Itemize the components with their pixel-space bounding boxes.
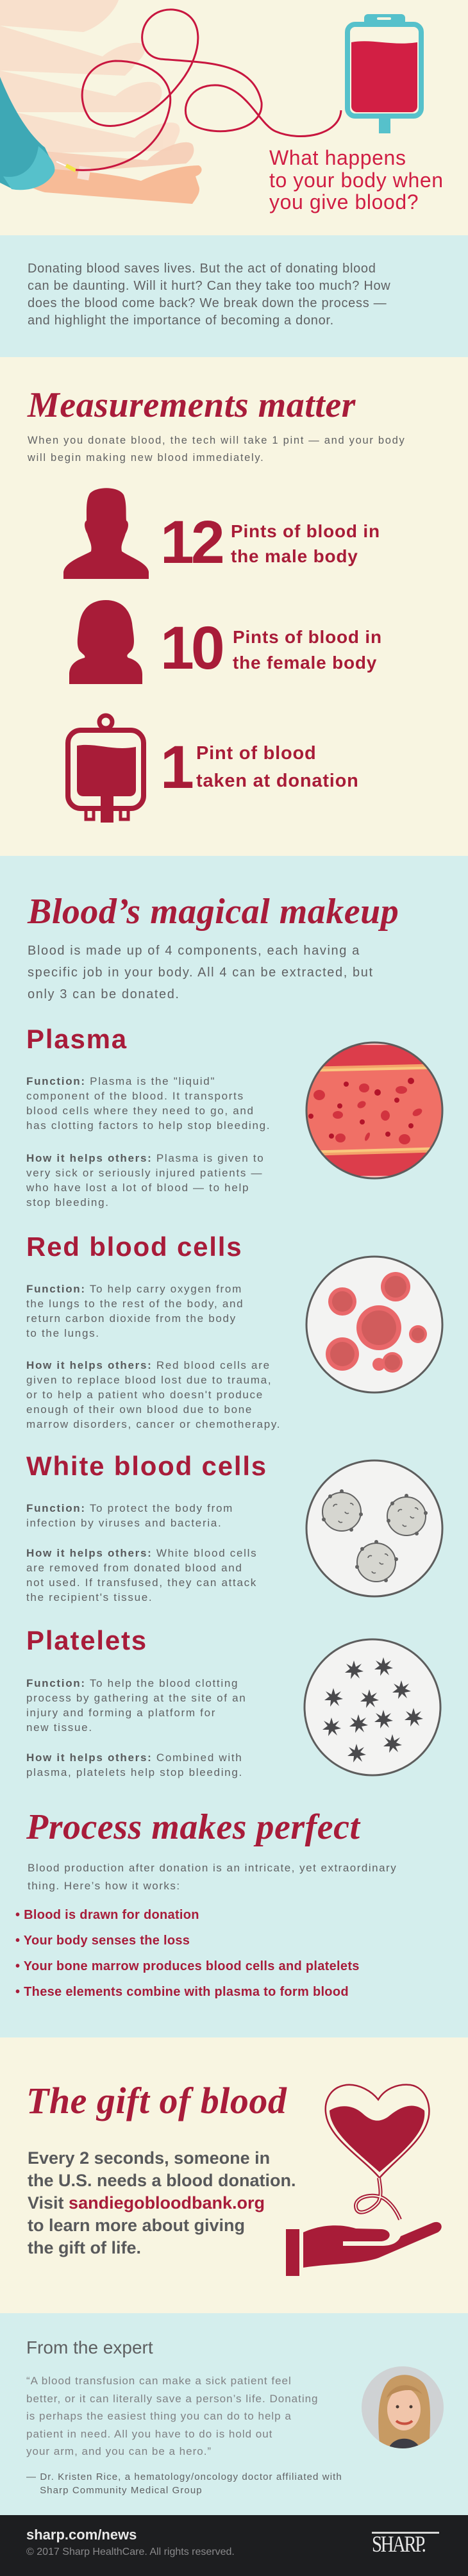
plasma text: blood cells where they need to go, and bbox=[26, 1105, 255, 1117]
icon: male silhouette bbox=[63, 488, 149, 579]
sleeve bbox=[0, 77, 54, 190]
footer: copyright: © 2017 Sharp HealthCare. All rights reserved. bbox=[26, 2547, 235, 2557]
rbc text: to the lungs. bbox=[26, 1327, 100, 1339]
gift text: Visit sandiegobloodbank.org bbox=[28, 2193, 265, 2212]
panel: red blood cells: marrow disorders, cancer or chemotherapy. bbox=[26, 1418, 281, 1430]
gift text: the U.S. needs a blood donation. bbox=[28, 2171, 296, 2190]
panel: red blood cells: given to replace blood lost due to trauma, bbox=[26, 1374, 272, 1386]
wbc text bbox=[26, 1502, 233, 1529]
list: process steps: • These elements combine with plasma to form blood bbox=[15, 1985, 349, 1999]
list: process steps: • Blood is drawn for donation bbox=[15, 1908, 199, 1922]
panel: plasma: very sick or seriously injured patients — bbox=[26, 1167, 263, 1179]
panel: plasma: who have lost a lot of blood — to help bbox=[26, 1182, 249, 1194]
makeup intro bbox=[28, 944, 374, 1001]
panel: red blood cells: or to help a patient who doesn't produce bbox=[26, 1389, 263, 1401]
panel: plasma bbox=[26, 1024, 271, 1209]
quote: is perhaps the easiest thing you can do to help a bbox=[26, 2410, 292, 2422]
ghost arms bbox=[0, 0, 180, 154]
gift text: the gift of life. bbox=[28, 2238, 141, 2257]
text: the male body bbox=[231, 546, 358, 566]
stat: 12 pints male: 12 bbox=[160, 508, 222, 576]
plasma text bbox=[26, 1075, 271, 1132]
panel: white blood cells: are removed from donated blood and bbox=[26, 1562, 243, 1574]
icon: female silhouette bbox=[69, 600, 142, 684]
makeup intro: only 3 can be donated. bbox=[28, 987, 180, 1001]
quote: “A blood transfusion can make a sick patient feel bbox=[26, 2375, 292, 2387]
text: taken at donation bbox=[196, 771, 359, 791]
band: teal expert bbox=[0, 2313, 468, 2515]
attribution: — Dr. Kristen Rice, a hematology/oncology doctor affiliated with bbox=[26, 2471, 342, 2482]
subtitle: measurements: will begin making new blood immediately. bbox=[28, 452, 264, 464]
tube bbox=[76, 10, 341, 170]
text: Pints of blood in bbox=[233, 627, 382, 647]
panel: red blood cells: enough of their own blood due to bone bbox=[26, 1403, 253, 1416]
icon: red blood cells circle bbox=[305, 1255, 444, 1394]
title: you give blood? bbox=[269, 190, 419, 213]
text: Pint of blood bbox=[196, 743, 317, 764]
blood bag bbox=[347, 14, 421, 133]
panel: platelets: How it helps others: Combined with bbox=[26, 1752, 242, 1764]
heading: blood's magical makeup: Blood’s magical makeup bbox=[28, 892, 399, 932]
logo: sharp: SHARP. bbox=[372, 2531, 424, 2557]
platelets text: Function: To help the blood clotting bbox=[26, 1677, 238, 1689]
photo: expert portrait bbox=[362, 2366, 444, 2448]
icon: plasma circle bbox=[305, 1041, 444, 1180]
text: Pints of blood in bbox=[231, 521, 380, 541]
gift text: Every 2 seconds, someone in bbox=[28, 2148, 270, 2168]
rbc text: return carbon dioxide from the body bbox=[26, 1312, 237, 1325]
intro text: and highlight the importance of becoming a donor. bbox=[28, 314, 334, 328]
heading: white blood cells: White blood cells bbox=[26, 1451, 267, 1481]
panel: white blood cells bbox=[26, 1451, 267, 1603]
process intro bbox=[28, 1862, 397, 1892]
list: process steps: • Your bone marrow produces blood cells and platelets bbox=[15, 1959, 360, 1973]
process intro: thing. Here’s how it works: bbox=[28, 1880, 181, 1892]
panel: red blood cells bbox=[26, 1232, 281, 1430]
makeup intro: Blood is made up of 4 components, each having a bbox=[28, 944, 360, 958]
hero illustration bbox=[0, 0, 424, 204]
quote: your arm, and you can be a hero.” bbox=[26, 2445, 212, 2457]
heading: measurements matter: Measurements matter bbox=[28, 385, 356, 425]
stat: 1 pint donated: 1 bbox=[160, 733, 194, 801]
panel: white blood cells: not used. If transfused, they can attack bbox=[26, 1577, 257, 1589]
icon: platelets circle bbox=[304, 1639, 441, 1776]
band: teal intro bbox=[0, 235, 468, 357]
list: process steps: • Your body senses the loss bbox=[15, 1934, 190, 1948]
gift text bbox=[28, 2148, 296, 2257]
rbc text: Function: To help carry oxygen from bbox=[26, 1283, 242, 1295]
makeup intro: specific job in your body. All 4 can be extracted, but bbox=[28, 966, 374, 980]
intro text: Donating blood saves lives. But the act of donating blood bbox=[28, 262, 376, 276]
wbc text: Function: To protect the body from bbox=[26, 1502, 233, 1514]
panel: platelets: plasma, platelets help stop bleeding. bbox=[26, 1766, 243, 1778]
main arm bbox=[19, 165, 202, 204]
subtitle: measurements bbox=[28, 435, 405, 464]
gift text: to learn more about giving bbox=[28, 2216, 245, 2235]
heading: plasma: Plasma bbox=[26, 1024, 128, 1054]
title bbox=[269, 146, 444, 213]
band: teal makeup bbox=[0, 856, 468, 2037]
band: footer bbox=[0, 2515, 468, 2576]
panel: white blood cells: the recipient's tissue. bbox=[26, 1591, 153, 1603]
plasma text: has clotting factors to help stop bleeding. bbox=[26, 1119, 271, 1132]
platelets text: process by gathering at the site of an bbox=[26, 1692, 246, 1704]
text: the female body bbox=[233, 653, 377, 673]
quote: patient in need. All you have to do is hold out bbox=[26, 2427, 272, 2440]
panel: plasma: How it helps others: Plasma is given to bbox=[26, 1152, 264, 1164]
subtitle: measurements: When you donate blood, the tech will take 1 pint — and your body bbox=[28, 435, 405, 446]
attribution: Sharp Community Medical Group bbox=[40, 2485, 203, 2496]
process intro: Blood production after donation is an intricate, yet extraordinary bbox=[28, 1862, 397, 1874]
quote bbox=[26, 2375, 319, 2457]
icon: white blood cells circle bbox=[305, 1459, 444, 1598]
heading: red blood cells: Red blood cells bbox=[26, 1232, 242, 1262]
panel: plasma: stop bleeding. bbox=[26, 1196, 110, 1209]
heading: from the expert: From the expert bbox=[26, 2338, 153, 2357]
attribution bbox=[26, 2471, 342, 2496]
needle and tape bbox=[77, 166, 91, 180]
title: to your body when bbox=[269, 168, 444, 191]
platelets text: new tissue. bbox=[26, 1721, 93, 1734]
plasma text: Function: Plasma is the "liquid" bbox=[26, 1075, 215, 1087]
list: process steps bbox=[15, 1908, 360, 1999]
wbc text: infection by viruses and bacteria. bbox=[26, 1517, 222, 1529]
footer: url: sharp.com/news bbox=[26, 2527, 137, 2543]
platelets text: injury and forming a platform for bbox=[26, 1707, 216, 1719]
quote: better, or it can literally save a person’s life. Donating bbox=[26, 2393, 319, 2404]
heading: process makes perfect: Process makes perfect bbox=[26, 1807, 360, 1847]
panel: platelets bbox=[26, 1625, 246, 1778]
title: What happens bbox=[269, 146, 406, 169]
panel: white blood cells: How it helps others: White blood cells bbox=[26, 1547, 257, 1559]
intro text: does the blood come back? We break down the process — bbox=[28, 296, 387, 310]
intro text: can be daunting. Will it hurt? Can they take too much? How bbox=[28, 279, 390, 293]
icon: blood bag bbox=[65, 713, 146, 823]
heading: platelets: Platelets bbox=[26, 1625, 147, 1655]
icon: heart in hand bbox=[286, 2084, 442, 2276]
heading: the gift of blood: The gift of blood bbox=[26, 2080, 287, 2121]
platelets text bbox=[26, 1677, 246, 1734]
rbc text bbox=[26, 1283, 244, 1339]
rbc text: the lungs to the rest of the body, and bbox=[26, 1298, 244, 1310]
panel: red blood cells: How it helps others: Red blood cells are bbox=[26, 1359, 271, 1371]
plasma text: component of the blood. It transports bbox=[26, 1090, 244, 1102]
stat: 10 pints female: 10 bbox=[160, 614, 222, 682]
intro text bbox=[28, 262, 390, 328]
